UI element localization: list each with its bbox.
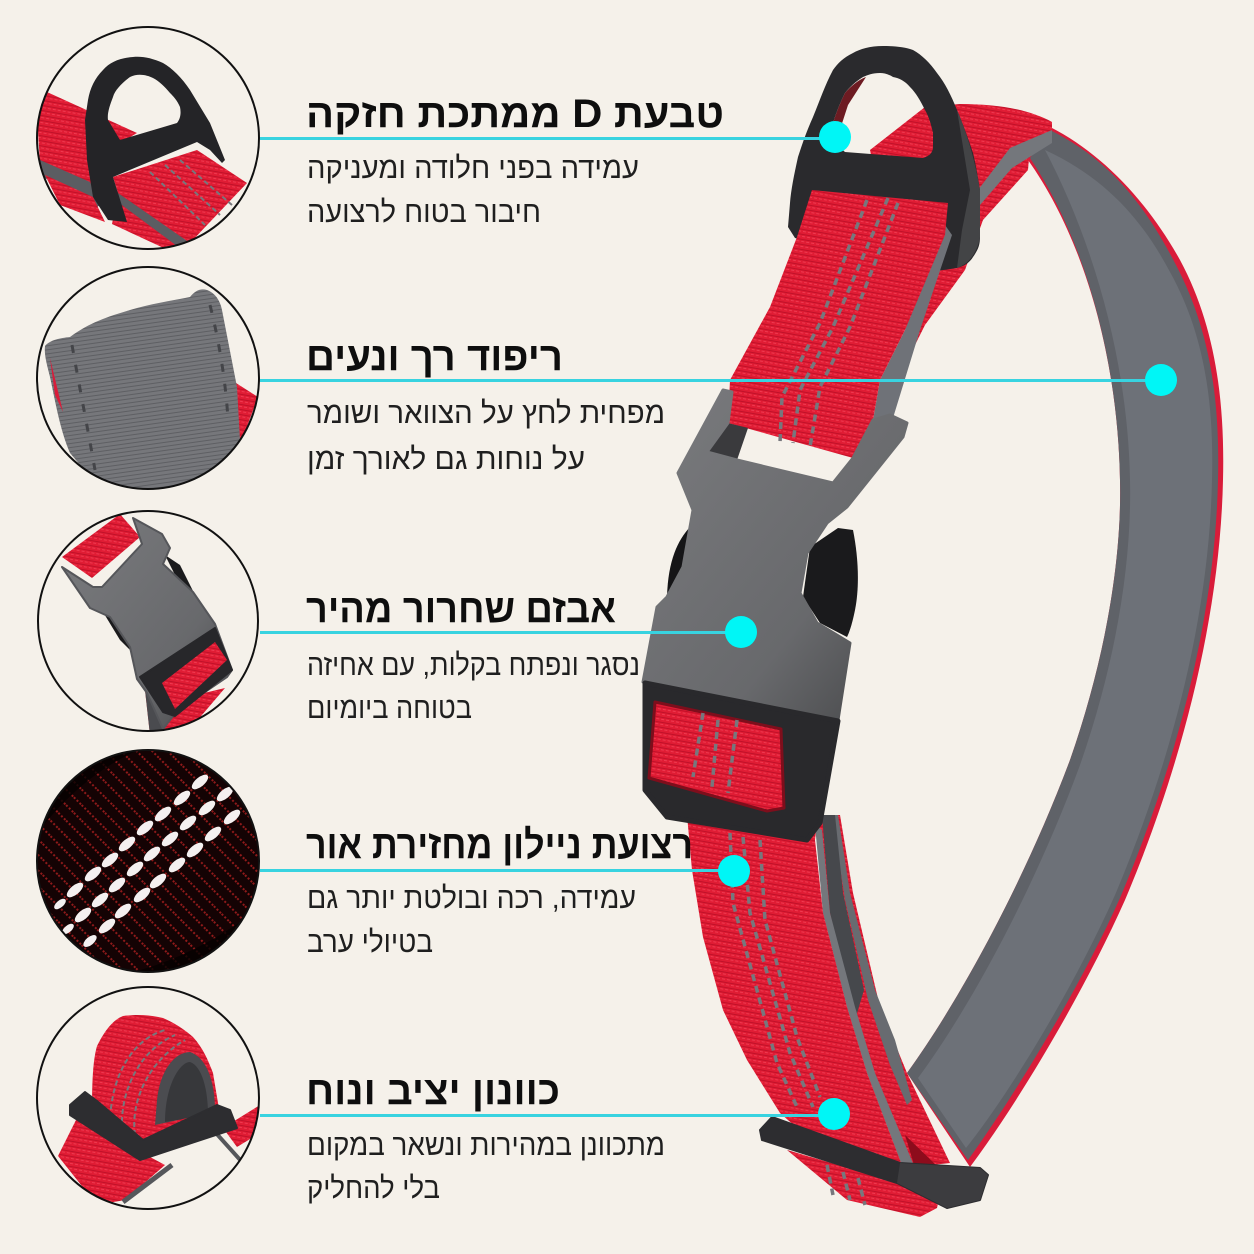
feature text: reflective nylon: עמידה, רכה ובולטת יותר גם xyxy=(307,882,636,915)
upper back strap xyxy=(870,104,1052,345)
buckle wall beside window xyxy=(707,423,748,460)
leader lines xyxy=(260,137,1160,1117)
feature text: D ring xyxy=(306,92,724,229)
metal D ring xyxy=(788,46,980,272)
buckle side tabs xyxy=(667,527,858,637)
detail circle: D ring xyxy=(36,27,259,250)
feature text: buckle xyxy=(306,587,640,725)
padded grey inner loop xyxy=(907,104,1223,1167)
detail circle: adjuster slider xyxy=(37,987,260,1209)
feature text: buckle: נסגר ונפתח בקלות, עם אחיזה xyxy=(307,649,640,682)
reflective stitches xyxy=(52,772,243,949)
feature text: reflective nylon xyxy=(306,823,693,959)
cyan marker dots xyxy=(718,121,1177,1130)
feature text: adjuster: מתכוונן במהירות ונשאר במקום xyxy=(307,1129,665,1162)
feature text: D ring: טבעת D ממתכת חזקה xyxy=(306,92,724,136)
front strap above buckle xyxy=(728,190,952,458)
feature text: adjuster xyxy=(306,1069,665,1205)
quick release buckle xyxy=(643,390,907,840)
lower front strap xyxy=(687,815,950,1217)
feature text: padding xyxy=(306,335,665,476)
feature text: D ring: חיבור בטוח לרצועה xyxy=(307,196,541,229)
buckle grey body xyxy=(643,390,907,720)
feature text: buckle: בטוחה ביומיום xyxy=(307,692,472,725)
feature text: padding: על נוחות גם לאורך זמן xyxy=(307,443,585,476)
feature text: D ring: עמידה בפני חלודה ומעניקה xyxy=(307,152,639,185)
feature text: buckle: אבזם שחרור מהיר xyxy=(306,587,616,631)
buckle black lower housing xyxy=(645,683,838,840)
black slider xyxy=(760,1117,988,1208)
detail circle: buckle xyxy=(38,511,258,735)
feature text: adjuster: בלי להחליק xyxy=(307,1172,440,1205)
detail circle: soft padding xyxy=(37,267,259,495)
feature text: padding: ריפוד רך ונעים xyxy=(306,335,563,379)
collar product photo xyxy=(643,46,1223,1217)
feature text: adjuster: כוונון יציב ונוח xyxy=(306,1069,560,1113)
feature text: reflective nylon: רצועת ניילון מחזירת אור xyxy=(306,823,693,867)
detail circle: reflective nylon at night xyxy=(30,745,270,975)
red strap in buckle window xyxy=(649,702,784,811)
feature text: padding: מפחית לחץ על הצוואר ושומר xyxy=(307,397,665,430)
feature text: reflective nylon: בטיולי ערב xyxy=(307,926,433,959)
